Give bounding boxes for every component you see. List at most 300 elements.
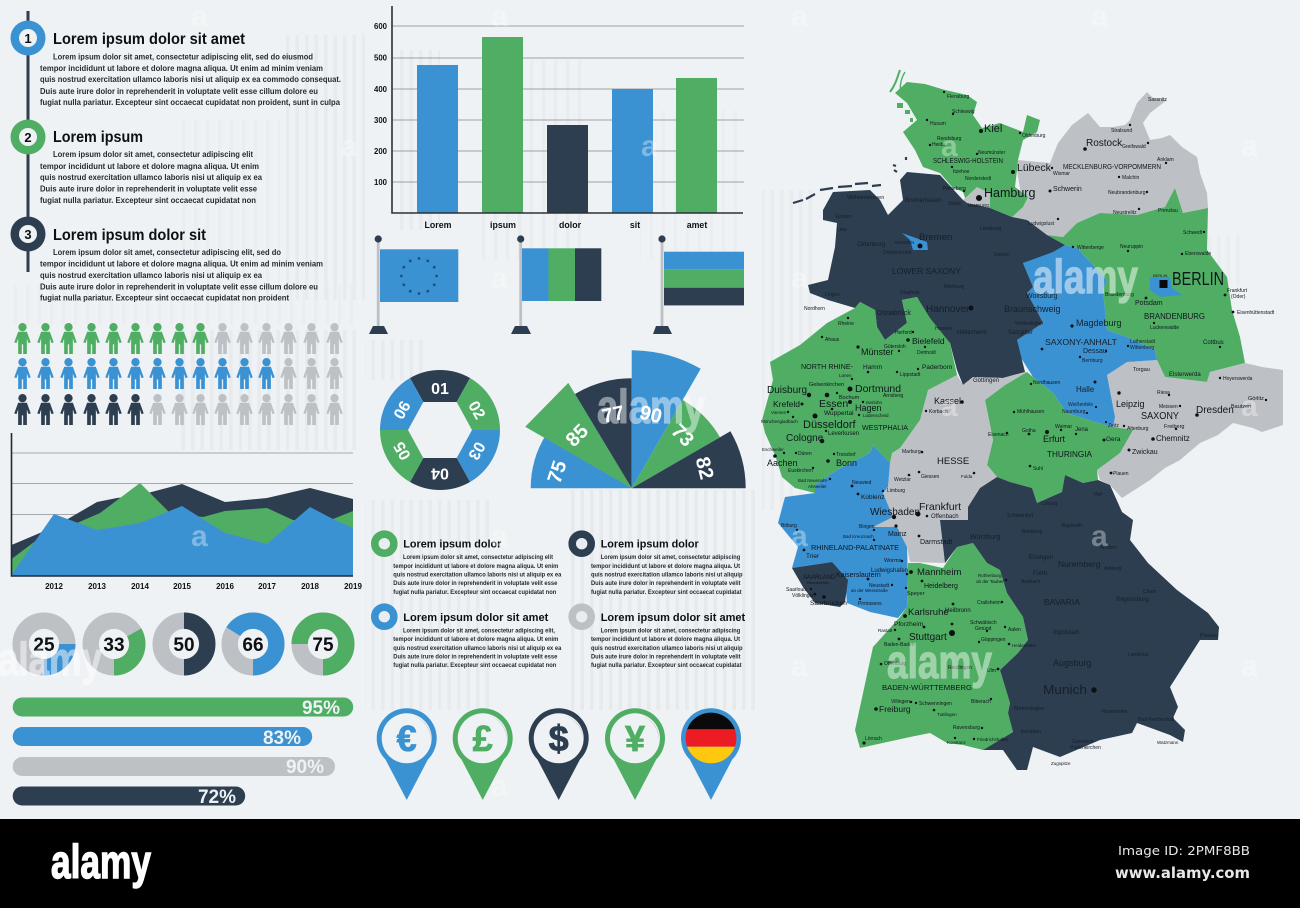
map labels: Schwerin — [1053, 186, 1082, 193]
map labels: Freiberg — [1164, 424, 1184, 430]
labels on dark regions: Munich — [1043, 682, 1087, 697]
map labels: Kassel — [934, 396, 961, 406]
labels on dark regions: Emden — [836, 214, 852, 220]
legend block: blue — [375, 607, 562, 669]
map labels: Offenburg — [884, 661, 906, 667]
map labels: MECKLENBURG-VORPOMMERN — [1063, 162, 1161, 171]
state: Bavaria — [940, 475, 1219, 770]
map labels: Crailsheim — [977, 600, 1001, 606]
map pin: yen: ¥ — [625, 718, 645, 759]
area chart 2012-2019: 2014 — [131, 582, 149, 591]
map labels: Mannheim — [917, 567, 961, 578]
bar 72%: 72% — [198, 787, 236, 808]
step 3: tempor incididunt ut labore et dolore magna aliqua. Ut enim ad minim veniam — [40, 258, 323, 268]
map labels: Wuppertal — [824, 410, 854, 417]
map labels: Viersen — [771, 410, 787, 415]
map labels: an der Weinstraße — [851, 588, 888, 593]
map labels: Baden-Baden — [884, 642, 915, 648]
map labels: Bochum — [839, 395, 860, 401]
segment 04: 04 — [431, 464, 449, 482]
map labels: Oldenburg — [1022, 133, 1046, 139]
step 3: Lorem ipsum dolor sit — [53, 227, 206, 244]
state: Lower Saxony — [808, 172, 1065, 385]
map labels: Eschweiler — [762, 447, 784, 452]
state: Hamburg — [963, 187, 990, 207]
sector 90: 90 — [637, 402, 664, 428]
labels on dark regions: Stade — [948, 201, 961, 207]
bar chart: 600 — [374, 22, 388, 31]
watermarks: a — [1091, 0, 1108, 33]
watermarks: a — [791, 650, 808, 683]
map labels: Ahrweiler — [808, 484, 827, 489]
map labels: Rendsburg — [937, 136, 962, 142]
map labels: Koblenz — [861, 494, 884, 501]
sector 73: 73 — [667, 420, 698, 451]
donut 75 — [300, 621, 346, 667]
labels on dark regions: Schweinfurt — [1007, 513, 1034, 519]
watermarks: a — [641, 130, 658, 163]
labels on dark regions: Hameln — [935, 326, 952, 332]
map labels: WESTPHALIA — [862, 425, 908, 432]
labels on dark regions: Hannover — [926, 304, 970, 315]
bar 83% — [13, 727, 312, 749]
labels on dark regions: Ansbach — [1021, 579, 1041, 585]
map labels: Neunkirchen — [807, 580, 829, 585]
map labels: Konstanz — [947, 740, 967, 745]
map labels: Nordhorn — [804, 306, 825, 312]
map labels: Dortmund — [855, 383, 901, 395]
labels on dark regions: Ludwigslust — [1028, 221, 1055, 227]
area chart 2012-2019: 2015 — [173, 582, 191, 591]
donut 33: 33 — [103, 635, 125, 656]
labels on dark regions: Landshut — [1128, 652, 1149, 658]
map labels: Leverkusen — [828, 431, 859, 437]
map labels: HAMBURG — [968, 203, 989, 208]
pictogram chart: people rows — [14, 323, 343, 425]
sector 77: 77 — [600, 402, 626, 428]
map labels: Norderstedt — [965, 176, 992, 182]
bar 95% — [13, 698, 353, 719]
state: Saxony — [1097, 360, 1283, 498]
sector 85 — [525, 383, 632, 488]
labels on dark regions: Partenkirchen — [1070, 745, 1101, 751]
legend block: blue: Lorem ipsum dolor sit amet, consectetur adipiscing elit, — [403, 628, 555, 634]
step 2: Lorem ipsum — [53, 129, 143, 146]
bar chart — [374, 6, 744, 230]
watermarks: a — [491, 262, 508, 295]
map labels: SAXONY — [1141, 411, 1179, 422]
map labels: Wittenberge — [1077, 245, 1104, 251]
legend block: navy: quis nostrud exercitation ullamco laboris nisi ut aliquip — [591, 572, 742, 578]
map labels: Weimar — [1055, 424, 1072, 430]
labels on dark regions: Ingolstadt — [1053, 630, 1079, 636]
labels on dark regions: Wolfenbüttel — [1015, 321, 1043, 327]
flag: EU on pole — [369, 235, 458, 334]
map labels: Bielefeld — [912, 336, 945, 346]
labels on dark regions: Zeitz — [1108, 423, 1119, 429]
bar chart: ipsum — [490, 220, 516, 230]
Berlin capital marker — [1160, 280, 1168, 288]
website: www.alamy.com — [1115, 864, 1250, 882]
legend block: green: Lorem ipsum dolor sit amet, consectetur adipiscing elit — [403, 554, 554, 561]
progress bars — [13, 698, 353, 808]
map labels: Düren — [798, 451, 812, 457]
map labels: Nordhausen — [1033, 380, 1060, 386]
map labels: Altenburg — [1127, 426, 1149, 432]
bar chart: 200 — [374, 147, 388, 156]
labels on dark regions: Erlangen — [1029, 555, 1053, 561]
map labels: Düsseldorf — [803, 419, 857, 431]
state: Bremen — [902, 233, 928, 250]
donut 50 — [161, 621, 207, 667]
step 1: 1 — [24, 31, 32, 46]
labels on dark regions: Weiden — [1100, 545, 1117, 551]
map labels: Brandenburg — [1105, 292, 1134, 298]
state: Schleswig-Holstein — [895, 82, 1040, 217]
map labels: Frankfurt — [919, 501, 961, 513]
alamy logo: alamy — [51, 835, 151, 888]
watermarks: a — [1241, 390, 1258, 423]
map labels: Flensburg — [947, 94, 969, 100]
map labels: Bad Neuenahr- — [798, 478, 829, 483]
map labels: Eisenach — [988, 432, 1009, 438]
labels on dark regions: Dessau — [1083, 348, 1107, 355]
watermarks: alamy — [1033, 250, 1138, 303]
map labels: Friedrichshafen — [977, 737, 1009, 742]
sector 77 — [575, 378, 632, 488]
watermarks: alamy — [597, 380, 705, 433]
watermarks: a — [1241, 650, 1258, 683]
map labels: Euskirchen — [788, 468, 813, 474]
map labels: Erfurt — [1043, 434, 1066, 444]
map labels: Hamm — [863, 364, 882, 371]
step 3: Lorem ipsum dolor sit amet, consectetur adipiscing elit, sed do — [53, 247, 281, 257]
step 2: fugiat nulla pariatur. Excepteur sint occaecat cupidatat non — [40, 195, 256, 205]
map pin: German flag — [681, 708, 741, 800]
bar 90%: 90% — [286, 757, 324, 778]
map labels: THURINGIA — [1047, 450, 1093, 459]
fan chart — [525, 350, 746, 488]
map labels: Darmstadt — [920, 539, 952, 546]
bar chart: 100 — [374, 178, 388, 187]
sector 85: 85 — [562, 420, 593, 451]
map labels: Pinneberg — [943, 186, 966, 192]
map labels: Neustadt — [869, 583, 890, 589]
map labels: Elsterwerda — [1169, 372, 1201, 378]
map labels: Paderborn — [922, 364, 953, 371]
map labels: Schwedt — [1183, 230, 1203, 236]
bar chart: 300 — [374, 116, 388, 125]
state: Brandenburg — [1047, 188, 1245, 382]
map labels: Itzehoe — [953, 169, 970, 175]
coastal islands — [793, 70, 913, 203]
map labels: Plauen — [1113, 471, 1129, 477]
watermarks: alamy — [0, 633, 102, 685]
donut 66 — [230, 621, 276, 667]
map labels: Gera — [1106, 436, 1121, 443]
map labels: Biberach — [971, 699, 991, 705]
watermarks: alamy — [887, 635, 992, 688]
map labels: Rheine — [838, 321, 854, 327]
map labels: Iserlohn — [866, 400, 883, 405]
sector 82: 82 — [691, 455, 717, 482]
map labels: Bautzen — [1231, 404, 1251, 410]
map labels: Speyer — [907, 591, 925, 597]
map labels: Neustrelitz — [1113, 210, 1137, 216]
sector 90 — [632, 350, 701, 488]
map labels — [761, 94, 1275, 766]
labels on dark regions: Leer — [837, 227, 847, 233]
labels on dark regions: Augsburg — [1053, 658, 1092, 668]
labels on dark regions: Weißenfels — [1068, 402, 1093, 408]
map pin: dollar: $ — [549, 718, 569, 759]
state: Rhineland-Palatinate — [778, 445, 908, 618]
map labels: Lörrach — [865, 736, 882, 742]
labels on dark regions: Lutherstadt — [1130, 339, 1156, 345]
legend block: grey: Lorem ipsum dolor sit amet — [601, 612, 745, 624]
labels on dark regions: Oldenburg — [857, 242, 885, 248]
labels on dark regions: Wolfsburg — [1026, 293, 1057, 300]
map labels: Aachen — [767, 458, 798, 468]
map labels: Stralsund — [1111, 128, 1132, 134]
step 2: 2 — [24, 130, 32, 145]
area chart 2012-2019: 2018 — [301, 582, 319, 591]
legend block: navy: Lorem ipsum dolor — [601, 538, 699, 550]
labels on dark regions: BREMEN — [895, 240, 914, 245]
map labels: Gotha — [1022, 428, 1036, 434]
map labels: Riesa — [1157, 390, 1170, 396]
map labels: Krefeld — [773, 399, 800, 409]
segment 05: 05 — [391, 438, 415, 462]
ring diagram 01-06 — [380, 370, 500, 490]
area chart 2012-2019: 2019 — [344, 582, 362, 591]
watermarks: a — [491, 770, 508, 803]
map labels: Greifswald — [1122, 144, 1146, 150]
map labels: Mainz — [888, 531, 907, 538]
map labels: (Oder) — [1231, 294, 1246, 300]
map labels: Rostock — [1086, 138, 1123, 149]
map labels: Malchin — [1122, 175, 1139, 181]
legend block: grey: Lorem ipsum dolor sit amet, consectetur adipiscing — [601, 628, 740, 634]
bar 83%: 83% — [263, 728, 301, 749]
labels on dark regions: Nienburg — [944, 284, 965, 290]
labels on dark regions: Kempten — [1021, 729, 1041, 735]
bar chart: sit — [630, 220, 640, 230]
labels on dark regions: Hof — [1094, 492, 1102, 498]
map labels: Ahaus — [825, 337, 840, 343]
map labels: Gelsenkirchen — [809, 382, 844, 388]
map labels: Ludwigshafen — [871, 568, 908, 574]
map labels: Frankfurt — [1227, 288, 1248, 294]
legend block: navy: fugiat nulla pariatur. Excepteur sint occaecat cupidatat — [591, 589, 742, 596]
bar chart: 400 — [374, 85, 388, 94]
labels on dark regions: LOWER SAXONY — [892, 267, 962, 276]
sector 82 — [632, 431, 746, 488]
map labels: BRANDENBURG — [1144, 312, 1205, 321]
map labels: Neuruppin — [1120, 244, 1143, 250]
segment 02: 02 — [464, 399, 488, 423]
labels on dark regions: Uelzen — [994, 252, 1010, 258]
map labels: Lübeck — [1017, 162, 1052, 174]
map labels: Eisenhüttenstadt — [1237, 310, 1275, 316]
area chart 2012-2019: 2016 — [216, 582, 234, 591]
map labels: Bingen — [859, 524, 875, 530]
labels on dark regions: Passau — [1200, 633, 1218, 639]
map labels: Lünen — [839, 373, 852, 378]
step 1: Lorem ipsum dolor sit amet — [53, 31, 245, 48]
map labels: Schleswig — [952, 109, 975, 115]
state: Thuringia — [985, 372, 1133, 503]
labels on dark regions: Bamberg — [1022, 529, 1043, 535]
map labels: BADEN-WÜRTTEMBERG — [882, 683, 972, 692]
watermarks: a — [791, 262, 808, 295]
map labels: Offenbach — [931, 514, 959, 520]
labels on dark regions: Göttingen — [973, 378, 999, 384]
watermarks: a — [491, 520, 508, 553]
map labels: Watzmann — [1157, 740, 1179, 745]
map labels: Jena — [1075, 427, 1089, 433]
area chart 2012-2019: 2013 — [88, 582, 106, 591]
state: Saarland — [792, 562, 848, 607]
map labels: Heidelberg — [924, 583, 958, 590]
city dots — [773, 91, 1267, 745]
labels on dark regions: Garmisch- — [1072, 739, 1095, 745]
watermarks: a — [941, 130, 958, 163]
map labels: Detmold — [917, 350, 936, 356]
map pin: pound — [453, 708, 513, 800]
donut 66: 66 — [242, 635, 264, 656]
step 3: quis nostrud exercitation ullamco laboris nisi ut aliquip ex ea — [40, 270, 262, 280]
map labels: Prenzlau — [1158, 208, 1178, 214]
area chart 2012-2019: 2017 — [258, 582, 276, 591]
footer band — [0, 819, 1300, 908]
map labels: Meissen — [1159, 404, 1178, 410]
map labels: Hoyerswerda — [1223, 376, 1253, 382]
donut 33 — [91, 621, 137, 667]
map pin: yen — [605, 708, 665, 800]
map pin: pound: £ — [473, 718, 493, 759]
sector 75 — [531, 435, 632, 488]
legend block: navy: Lorem ipsum dolor sit amet, consectetur adipiscing — [601, 554, 740, 561]
map labels: HESSE — [937, 456, 969, 467]
segment 03: 03 — [464, 439, 488, 463]
map labels: Torgau — [1133, 367, 1150, 373]
map labels: Neuwied — [852, 480, 872, 486]
map pin: dollar — [529, 708, 589, 800]
map labels: Korbach — [929, 409, 948, 415]
legend block: grey: fugiat nulla pariatur. Excepteur sint occaecat cupidatat — [591, 662, 742, 669]
labels on dark regions: Coburg — [1041, 501, 1058, 507]
map labels: Wetzlar — [894, 477, 911, 483]
map labels: Ulm — [987, 668, 996, 674]
map labels: Herford — [895, 330, 912, 336]
map labels: BERLIN — [1172, 269, 1224, 289]
labels on dark regions: Delmenhorst — [883, 250, 912, 256]
donut 75: 75 — [312, 635, 334, 656]
map labels: Cottbus — [1203, 340, 1224, 346]
sector 73 — [632, 400, 720, 488]
donut 50: 50 — [173, 635, 195, 656]
legend block: grey — [572, 607, 745, 669]
legend block: grey: tempor incididunt ut labore et dolore magna aliqua. Ut — [591, 636, 741, 643]
labels on dark regions: Amberg — [1104, 566, 1122, 572]
bar chart: dolor — [559, 220, 582, 230]
labels on dark regions: Osnabrück — [877, 310, 911, 317]
map labels: SAARLAND — [803, 575, 836, 581]
map labels: Zugspitze — [1051, 761, 1071, 766]
map labels: Limburg — [887, 488, 905, 494]
watermarks: a — [791, 0, 808, 33]
step 2 — [10, 120, 262, 205]
map labels: Reutlingen — [948, 665, 972, 671]
labels on dark regions: Naumburg — [1062, 409, 1086, 415]
state: Saxony-Anhalt — [1017, 245, 1157, 427]
segment 06: 06 — [391, 398, 415, 422]
donut 25 — [21, 621, 67, 667]
donut 25: 25 — [33, 635, 55, 656]
watermarks: a — [341, 130, 358, 163]
flag: vertical tricolour on pole — [511, 235, 601, 334]
map labels: Bad Kreuznach — [843, 534, 874, 539]
map labels: Arnsberg — [883, 393, 904, 399]
map labels: Bonn — [836, 458, 857, 468]
watermarks: a — [191, 0, 208, 33]
watermarks: a — [791, 520, 808, 553]
map labels: Völklingen — [792, 593, 815, 599]
map labels: Eberswalde — [1185, 251, 1211, 257]
labels on dark regions: Würzburg — [970, 534, 1000, 541]
labels on dark regions: Wittenberg — [1130, 345, 1154, 351]
area chart 2012-2019 — [12, 433, 362, 591]
map labels: Rothenburg — [978, 573, 1002, 578]
step 1: quis nostrud exercitation ullamco laboris nisi ut aliquip ex ea commodo consequat. — [40, 74, 341, 84]
map labels: Potsdam — [1135, 300, 1163, 307]
labels on dark regions: BAVARIA — [1044, 598, 1081, 607]
step 2: Lorem ipsum dolor sit amet, consectetur adipiscing elit — [53, 149, 253, 159]
legend block: grey: Duis aute irure dolor in reprehenderit in voluptate velit — [591, 654, 741, 660]
image id: Image ID: 2PMF8BB — [1118, 843, 1250, 858]
bar 72% — [13, 786, 245, 808]
step 3: Duis aute irure dolor in reprehenderit in voluptate velit esse cillum dolore eu — [40, 282, 318, 292]
legend block: green: quis nostrud exercitation ullamco laboris nisi ut aliquip ex ea — [393, 572, 562, 578]
map labels: Göppingen — [981, 637, 1006, 643]
map labels: Anklam — [1157, 157, 1174, 163]
step 1: Duis aute irure dolor in reprehenderit in voluptate velit esse cillum dolore eu — [40, 86, 318, 96]
step 2: tempor incididunt ut labore et dolore magna aliqua. Ut enim — [40, 161, 259, 171]
step 2: quis nostrud exercitation ullamco laboris nisi ut aliquip ex ea — [40, 172, 262, 182]
map labels: Tuttlingen — [937, 712, 957, 717]
map labels: Kiel — [984, 123, 1002, 135]
step 1 — [10, 20, 341, 107]
labels on dark regions: Nuremberg — [1058, 559, 1101, 569]
map labels: Schwäbisch — [970, 620, 997, 626]
map labels: Luckenwalde — [1150, 325, 1179, 331]
map labels: Neubrandenburg — [1108, 190, 1146, 196]
labels on dark regions: Halle — [1076, 385, 1095, 394]
map labels: Marburg — [902, 449, 921, 455]
legend block: green: fugiat nulla pariatur. Excepteur sint occaecat cupidatat non — [393, 589, 556, 596]
map labels: Zwickau — [1132, 449, 1158, 456]
legend block: navy: tempor incididunt ut labore et dolore magna aliqua. Ut — [591, 563, 741, 570]
numbered list: three text steps — [10, 11, 341, 302]
map labels: Heilbronn — [945, 608, 971, 614]
map labels: NORTH RHINE- — [801, 362, 853, 371]
bar chart: amet — [687, 220, 707, 230]
map labels: RHINELAND-PALATINATE — [811, 543, 899, 552]
labels on dark regions: Bad Reichenhall — [1138, 717, 1174, 723]
labels on dark regions: Bayreuth — [1062, 523, 1082, 529]
step 3 — [10, 216, 323, 302]
